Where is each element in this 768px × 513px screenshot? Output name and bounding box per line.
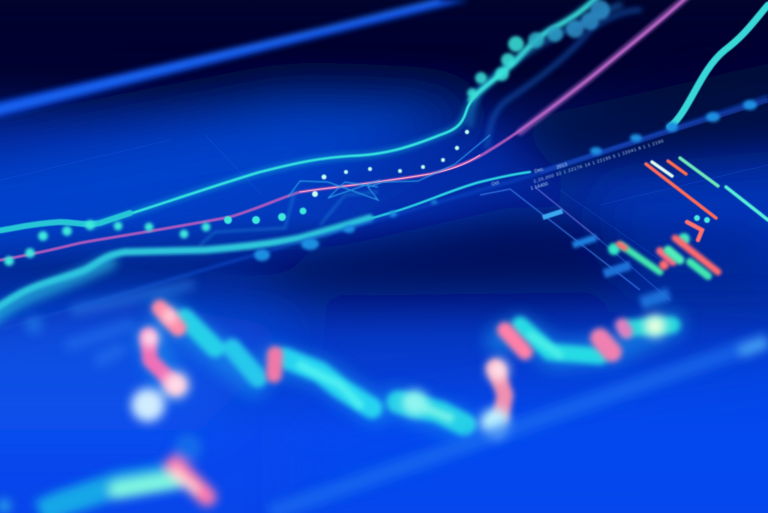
teal segments [185, 318, 672, 425]
axis tick labels: 2,20,000 32 1 2217K 14 1 22195 5 1 22041 8 1 1 2190 [533, 138, 665, 184]
outer glow [150, 312, 670, 425]
blurred top blue bar [0, 0, 470, 119]
grid lines [0, 135, 768, 260]
axis tick labels [491, 138, 665, 192]
lower axis band [0, 96, 768, 330]
teal price line, lower [0, 172, 530, 320]
upper dark trace lines [470, 5, 640, 147]
candlesticks, right panel [608, 158, 768, 276]
large blurred chart, foreground [25, 285, 672, 438]
pink segments [148, 308, 626, 420]
lower blurred axis band [270, 340, 768, 513]
dotted indicator [4, 0, 610, 266]
blurred bottom-left candles [0, 434, 207, 513]
axis tick bars [542, 209, 671, 309]
axis tick labels: Dec [534, 166, 545, 175]
axis tick labels: 2013 [556, 162, 568, 171]
axis tick labels: 1 14400 [530, 181, 549, 192]
teal price line, upper [0, 0, 600, 231]
bright highlights [131, 309, 666, 438]
axis markers along top axis [254, 100, 757, 261]
thin jagged blue line [288, 135, 490, 200]
pink moving average line [0, 0, 688, 262]
axis frame lines [480, 187, 670, 300]
axis tick labels: Oct [491, 180, 501, 188]
teal price line, right edge [670, 5, 768, 127]
